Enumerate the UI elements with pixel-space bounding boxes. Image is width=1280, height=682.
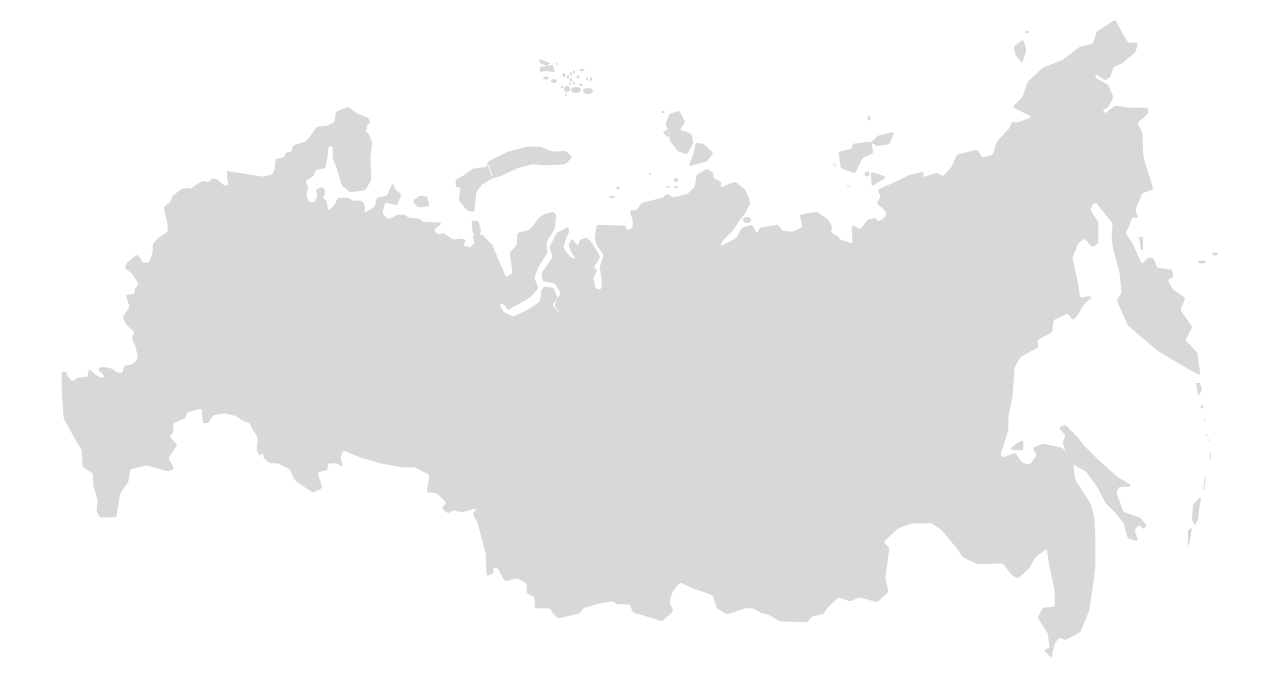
islands: Franz Josef Land bbox=[539, 59, 593, 96]
islands: Kurils bbox=[1188, 383, 1211, 545]
islands: small Kara Sea bbox=[609, 111, 751, 223]
island: Sakhalin bbox=[1059, 425, 1146, 541]
island: Novaya Zemlya bbox=[456, 147, 572, 212]
island: Wrangel bbox=[1014, 40, 1026, 63]
islands: New Siberian bbox=[839, 132, 894, 186]
islands: Severnaya Zemlya bbox=[666, 111, 713, 166]
islands: Commander bbox=[1198, 252, 1218, 264]
island: Vaygach bbox=[472, 221, 481, 236]
strait: Matochkin Shar bbox=[488, 165, 492, 176]
island: Shantar bbox=[1010, 440, 1023, 450]
islands: small East Siberian bbox=[833, 31, 1029, 187]
island: Karaginsky bbox=[1139, 237, 1143, 250]
island: Kolguev bbox=[413, 196, 429, 207]
